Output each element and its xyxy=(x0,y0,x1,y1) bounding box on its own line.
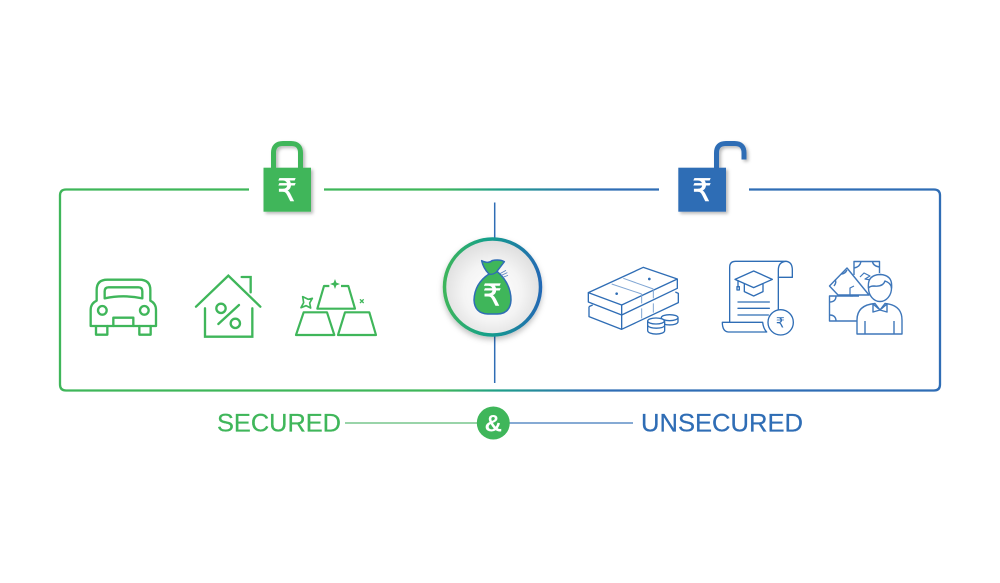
icon: house with percent xyxy=(196,276,260,337)
icon: car xyxy=(91,280,156,335)
panel: secured closed padlock xyxy=(264,144,311,212)
panel: unsecured open padlock xyxy=(678,144,744,212)
icon: person with banknotes xyxy=(830,262,902,334)
icon: rupee on green padlock: ₹ xyxy=(277,173,297,209)
icon: stacked cash bundles and coins xyxy=(588,267,678,334)
frame: secured and unsecured container xyxy=(60,190,940,390)
icon: education loan scroll xyxy=(722,261,793,335)
connector: green line to ampersand xyxy=(345,422,478,424)
badge: ampersand xyxy=(477,406,510,440)
icon: gold bars xyxy=(296,279,376,335)
connector: blue line from ampersand xyxy=(509,422,633,424)
icon: education loan scroll: ₹ xyxy=(776,315,785,331)
divider: centre vertical line xyxy=(494,202,496,383)
heading: unsecured label: UNSECURED xyxy=(641,410,803,438)
badge: ampersand: & xyxy=(485,410,502,438)
icon: rupee on blue padlock: ₹ xyxy=(692,173,712,209)
heading: secured label: SECURED xyxy=(217,410,341,438)
panel: centre medallion with money bag xyxy=(444,239,540,335)
icon: money bag: ₹ xyxy=(483,279,502,314)
